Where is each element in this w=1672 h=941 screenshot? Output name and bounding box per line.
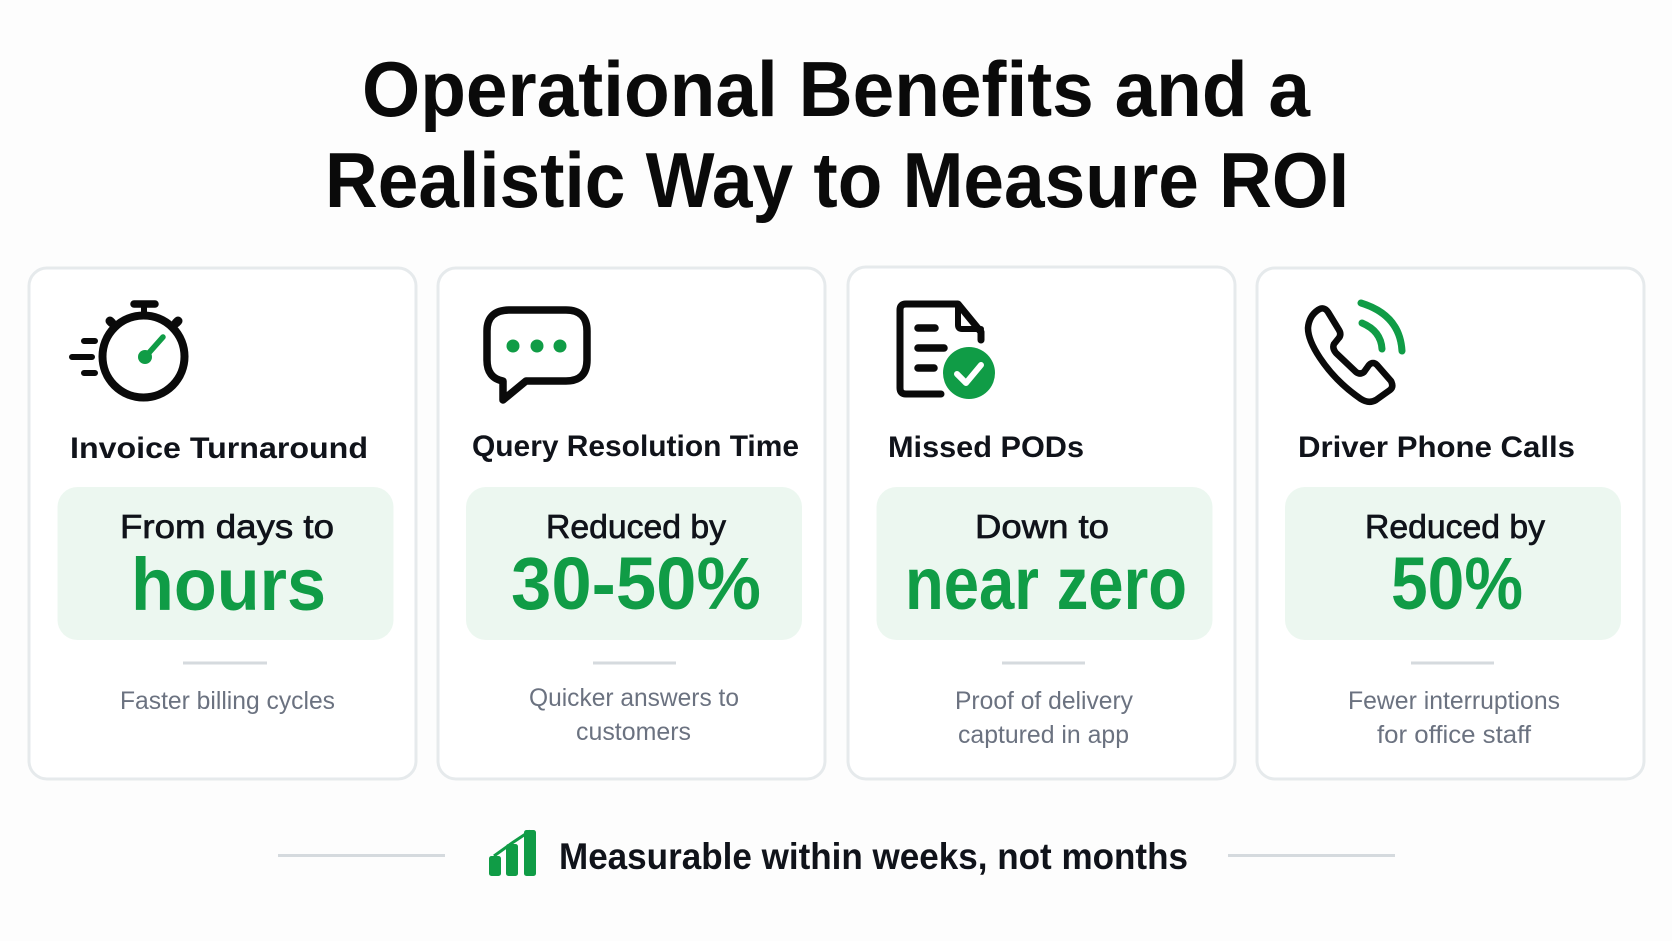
metric box <box>876 487 1212 640</box>
label: missed pods: Missed PODs <box>888 431 1084 464</box>
description: customers <box>576 718 691 746</box>
metric box: 30-50% <box>511 542 761 625</box>
icon: rising bars <box>489 830 536 876</box>
panel: missed pods <box>848 267 1235 779</box>
description: Proof of delivery <box>955 687 1133 715</box>
description: for office staff <box>1377 721 1531 749</box>
metric box: 50% <box>1391 542 1523 625</box>
icon: phone with signal <box>1308 303 1402 402</box>
title: Realistic Way to Measure ROI <box>325 136 1349 224</box>
metric box: Reduced by <box>546 508 727 545</box>
panel: query resolution time <box>438 268 825 779</box>
icon: stopwatch <box>72 304 184 398</box>
metric box <box>1285 487 1621 640</box>
description <box>529 684 739 746</box>
metric box <box>58 487 394 640</box>
title: Operational Benefits and a <box>362 45 1311 133</box>
description: Faster billing cycles <box>120 687 335 715</box>
metric box <box>466 487 802 640</box>
label: query resolution time: Query Resolution Time <box>472 430 799 463</box>
description <box>955 687 1133 749</box>
label: driver phone calls: Driver Phone Calls <box>1298 431 1575 464</box>
footer callout <box>278 830 1395 877</box>
description: Fewer interruptions <box>1348 687 1560 715</box>
metric box: Reduced by <box>1365 508 1546 545</box>
icon: document with check <box>900 304 995 399</box>
metric box: hours <box>131 543 326 626</box>
description <box>1348 687 1560 749</box>
metric box: Down to <box>975 508 1109 545</box>
description: Quicker answers to <box>529 684 739 712</box>
panel: driver phone calls <box>1257 268 1644 779</box>
panel: invoice turnaround <box>29 268 416 779</box>
metric box: From days to <box>120 508 334 545</box>
footer text: Measurable within weeks, not months <box>559 836 1188 877</box>
title <box>325 45 1349 224</box>
description: captured in app <box>958 721 1129 749</box>
icon: chat bubble <box>487 310 587 400</box>
label: invoice turnaround: Invoice Turnaround <box>70 432 368 465</box>
metric box: near zero <box>905 542 1187 625</box>
